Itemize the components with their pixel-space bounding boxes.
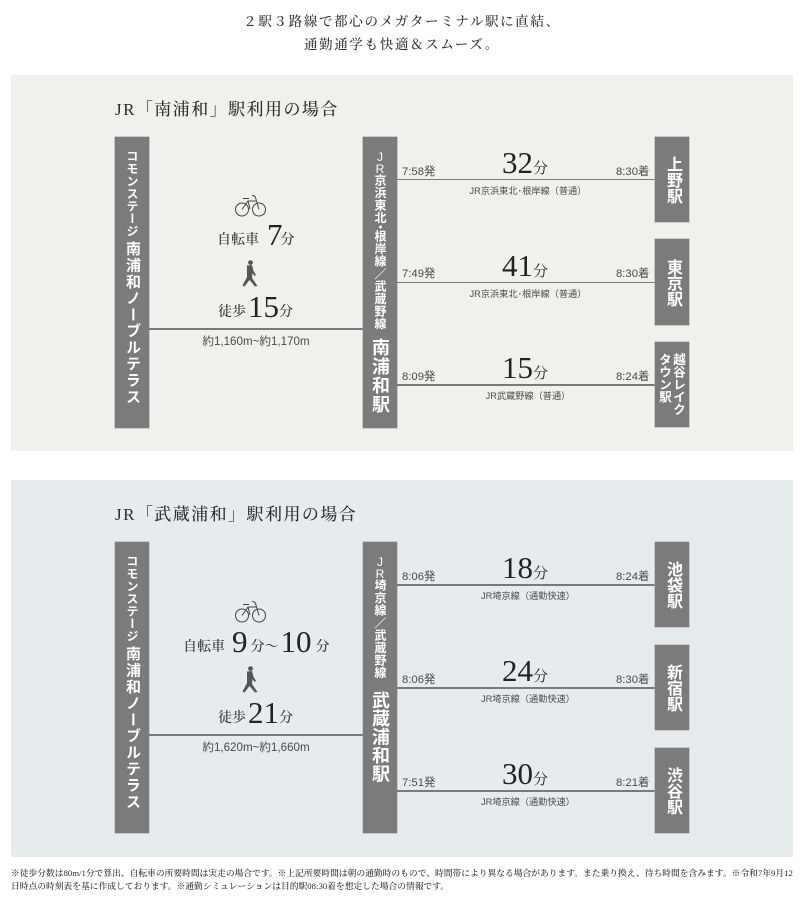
cycling time: 自転車 7分 — [217, 217, 294, 252]
route: Ueno — [397, 145, 654, 196]
destination: Ikebukuro: 池袋駅 — [664, 561, 681, 609]
duration: 15分 — [502, 350, 548, 385]
line name: JR京浜東北･根岸線（普通） — [470, 186, 586, 196]
arrival: 8:30着 — [616, 166, 649, 178]
duration: 18分 — [502, 550, 548, 585]
cycling time: 自転車9分～10 分 — [183, 624, 330, 659]
route: Tokyo — [397, 248, 654, 299]
route line — [397, 384, 655, 386]
departure: 7:51発 — [402, 777, 435, 789]
line names: JR 埼京線／武蔵野線 — [373, 555, 387, 679]
destination: Ueno — [655, 137, 689, 222]
duration: 30分 — [502, 756, 548, 791]
arrival: 8:24着 — [616, 571, 649, 583]
walking time: 徒歩15分 — [218, 289, 293, 324]
panel: Minami-Urawa station — [11, 75, 793, 451]
icon: walker — [242, 666, 258, 692]
residence bar — [115, 137, 149, 428]
station bar — [363, 137, 397, 428]
arrival: 8:30着 — [616, 268, 649, 280]
destination: Shinjuku: 新宿駅 — [664, 664, 681, 712]
line name: JR埼京線（通勤快速） — [481, 694, 575, 704]
heading: Minami-Urawa: JR「南浦和」駅利用の場合 — [115, 100, 339, 119]
route line — [397, 790, 655, 792]
departure: 7:49発 — [402, 268, 435, 280]
distance: 約1,160m~約1,170m — [202, 335, 310, 348]
connector line — [149, 328, 363, 330]
headline — [243, 14, 561, 52]
distance: 約1,620m~約1,660m — [202, 741, 310, 754]
destination: Shibuya — [655, 748, 689, 833]
destination: Ueno: 上野駅 — [664, 156, 681, 204]
route: Koshigaya Lake Town — [397, 350, 654, 401]
route line — [397, 178, 655, 180]
line names: JR 京浜東北・根岸線／武蔵野線 — [373, 150, 387, 330]
station bar — [363, 542, 397, 833]
departure: 8:06発 — [402, 571, 435, 583]
footnote: 日時点の時刻表を基に作成しております。※通勤シミュレーションは目的駅08:30着を想定した場合の情報です。 — [11, 881, 449, 891]
footnote — [11, 868, 793, 891]
residence name: コモンステージ — [125, 150, 139, 238]
station name: 武蔵浦和駅 — [370, 691, 390, 783]
residence bar — [115, 542, 149, 833]
icon: bicycle — [235, 601, 266, 622]
route line — [397, 282, 655, 283]
destination: Koshigaya Lake Town — [655, 342, 689, 427]
icon: bicycle — [235, 195, 266, 216]
destination: Tokyo — [655, 239, 689, 325]
destination: Tokyo: 東京駅 — [664, 259, 681, 307]
route: Ikebukuro — [397, 550, 654, 601]
destination: Koshigaya Lake Town: 越谷レイク タウン駅 — [657, 353, 685, 416]
icon: walker — [242, 260, 258, 286]
route line — [397, 687, 655, 688]
line name: JR京浜東北･根岸線（普通） — [470, 289, 586, 299]
line name: JR武蔵野線（普通） — [486, 391, 570, 401]
walking time: 徒歩21分 — [218, 695, 293, 730]
route line — [397, 584, 655, 586]
destination: Ikebukuro — [655, 542, 689, 627]
arrival: 8:21着 — [616, 777, 649, 789]
residence name main: 南浦和ノーブルテラス — [124, 241, 141, 405]
route: Shibuya — [397, 756, 654, 807]
duration: 24分 — [502, 653, 548, 688]
duration: 32分 — [502, 145, 548, 180]
residence name main: 南浦和ノーブルテラス — [124, 646, 141, 810]
panel: Musashi-Urawa station — [11, 480, 793, 857]
station name: 南浦和駅 — [370, 338, 390, 414]
destination: Shinjuku — [655, 645, 689, 730]
footnote: ※徒歩分数は80m/1分で算出、自転車の所要時間は実走の場合です。※上記所要時間は朝の通勤時のもので、時間帯により異なる場合があります。また乗り換え、待ち時間を含みます。※令和7年9月12 — [11, 868, 793, 878]
line name: JR埼京線（通勤快速） — [481, 591, 575, 601]
destination: Shibuya: 渋谷駅 — [664, 767, 681, 815]
heading: Musashi-Urawa: JR「武蔵浦和」駅利用の場合 — [115, 505, 357, 524]
headline: ２駅３路線で都心のメガターミナル駅に直結、 — [243, 14, 561, 29]
line name: JR埼京線（通勤快速） — [481, 797, 575, 807]
connector line — [149, 734, 363, 736]
route: Shinjuku — [397, 653, 654, 704]
arrival: 8:24着 — [616, 371, 649, 383]
departure: 8:09発 — [402, 371, 435, 383]
arrival: 8:30着 — [616, 674, 649, 686]
departure: 7:58発 — [402, 166, 435, 178]
departure: 8:06発 — [402, 674, 435, 686]
duration: 41分 — [502, 248, 548, 283]
residence name: コモンステージ — [125, 555, 139, 642]
headline: 通勤通学も快適＆スムーズ。 — [304, 37, 500, 52]
